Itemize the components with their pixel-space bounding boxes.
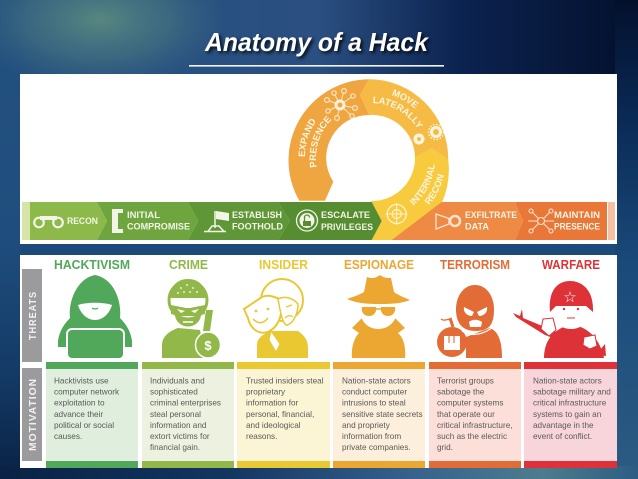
text: warfare motivation: event of conflict. — [533, 432, 592, 441]
ring segment: move laterally: MOVE — [392, 89, 419, 109]
panel: threats and motivation — [20, 255, 617, 468]
text: warfare motivation: advantage in the — [533, 421, 594, 430]
text: terrorism motivation: sabotage the — [437, 388, 485, 397]
text: insider motivation: personal, financial, — [246, 410, 314, 419]
text: hacktivism motivation: exploitation to — [54, 399, 105, 408]
column: hacktivism: HACKTIVISM — [54, 257, 130, 272]
ring segment: expand presence — [288, 79, 370, 201]
ring segment: internal recon: INTERNAL — [410, 164, 435, 206]
stage: initial compromise: COMPROMISE — [127, 222, 190, 232]
text: insider motivation: Trusted insiders steal — [246, 376, 324, 386]
icon: masked criminal with money bag — [162, 279, 220, 358]
text: crime motivation: information and — [150, 421, 207, 430]
column: insider — [237, 257, 330, 468]
ring segment: internal recon: RECON — [424, 174, 444, 205]
text: insider motivation: and ideological — [246, 421, 301, 430]
band start strip — [22, 202, 30, 240]
text: espionage motivation: information from — [342, 432, 401, 441]
text: crime motivation: sophisticated — [150, 388, 198, 397]
stage: escalate privileges: PRIVILEGES — [321, 222, 373, 233]
text: insider motivation: reasons. — [246, 432, 277, 441]
text: warfare motivation: sabotage military and — [533, 388, 611, 397]
icon: masked criminal with money bag: $ — [204, 338, 212, 353]
column: warfare: WARFARE — [542, 257, 600, 272]
stage: exfiltrate data: EXFILTRATE — [465, 210, 517, 221]
stage: escalate privileges — [278, 202, 382, 240]
text: espionage motivation: conduct computer — [342, 388, 407, 397]
icon: balaclava with bomb — [437, 285, 502, 358]
stage: maintain presence: PRESENCE — [554, 222, 600, 232]
text: warfare motivation: critical infrastructure — [533, 399, 607, 408]
ring segment: expand presence: PRESENCE — [310, 116, 332, 168]
row label: threats — [22, 269, 42, 362]
text: espionage motivation: Nation-state actors — [342, 376, 411, 386]
text: espionage motivation: private companies. — [342, 443, 411, 452]
stage: initial compromise: INITIAL — [127, 210, 160, 221]
row label: motivation: MOTIVATION — [27, 378, 39, 451]
column: espionage — [333, 257, 425, 468]
ring segment: internal recon — [371, 148, 449, 240]
text: hacktivism motivation: Hacktivists use — [54, 376, 109, 386]
text: warfare motivation: Nation-state actors — [533, 376, 602, 386]
row label: threats: THREATS — [27, 291, 39, 340]
icon: hooded hacker — [58, 275, 132, 359]
column: crime — [142, 257, 234, 468]
stage: establish foothold: ESTABLISH — [232, 210, 282, 221]
text: espionage motivation: intrusions to steal — [342, 399, 406, 408]
text: terrorism motivation: computer systems — [437, 399, 503, 408]
text: warfare motivation: systems to gain an — [533, 410, 602, 419]
text: terrorism motivation: Terrorist groups — [437, 376, 494, 386]
stage: escalate privileges: ESCALATE — [321, 210, 370, 221]
column: espionage: ESPIONAGE — [344, 257, 414, 272]
stage: initial compromise — [97, 202, 198, 240]
text: insider motivation: information for — [246, 399, 299, 408]
text: terrorism motivation: grid. — [437, 443, 453, 452]
text: crime motivation: criminal enterprises — [150, 399, 221, 408]
text: crime motivation: extort victims for — [150, 432, 210, 441]
text: crime motivation: steal personal — [150, 410, 201, 419]
text: crime motivation: Individuals and — [150, 376, 205, 386]
text: hacktivism motivation: advance their — [54, 410, 103, 419]
column: terrorism — [429, 257, 521, 468]
icon: spy in hat — [347, 275, 410, 358]
stage: exfiltrate data — [392, 202, 523, 240]
text: espionage motivation: sensitive state secrets — [342, 410, 423, 419]
stage: maintain presence: MAINTAIN — [554, 210, 600, 221]
column: warfare — [513, 257, 617, 468]
text: terrorism motivation: such as the electric — [437, 432, 507, 441]
row label: motivation — [22, 368, 42, 461]
text: terrorism motivation: that operate our — [437, 410, 495, 419]
ring segment: move laterally: LATERALLY — [373, 96, 424, 128]
title: Anatomy of a Hack — [204, 27, 429, 57]
column: insider: INSIDER — [259, 257, 309, 272]
text: crime motivation: financial gain. — [150, 443, 200, 452]
icon: insider with mask — [244, 279, 308, 358]
stage: recon: RECON — [67, 216, 98, 227]
text: espionage motivation: and propriety — [342, 421, 391, 430]
text: hacktivism motivation: causes. — [54, 432, 82, 441]
stage: establish foothold: FOOTHOLD — [232, 222, 283, 232]
column: hacktivism — [46, 257, 138, 468]
stage: establish foothold — [188, 202, 290, 240]
ring segment: expand presence: EXPAND — [298, 118, 315, 156]
stage: exfiltrate data: DATA — [465, 222, 489, 232]
text: terrorism motivation: critical infrastructure, — [437, 421, 513, 430]
band end strip — [608, 202, 615, 240]
column: crime: CRIME — [169, 257, 208, 272]
text: hacktivism motivation: political or social — [54, 421, 114, 430]
text: insider motivation: proprietary — [246, 388, 286, 397]
text: hacktivism motivation: computer network — [54, 388, 120, 397]
icon: soldier with rifle: ☆ — [563, 289, 577, 306]
icon: soldier with rifle — [513, 281, 606, 358]
ring segment: move laterally — [360, 79, 448, 160]
column: terrorism: TERRORISM — [440, 257, 510, 272]
stage: maintain presence — [515, 202, 607, 240]
panel: attack lifecycle — [20, 74, 617, 244]
stage: recon — [30, 202, 107, 240]
